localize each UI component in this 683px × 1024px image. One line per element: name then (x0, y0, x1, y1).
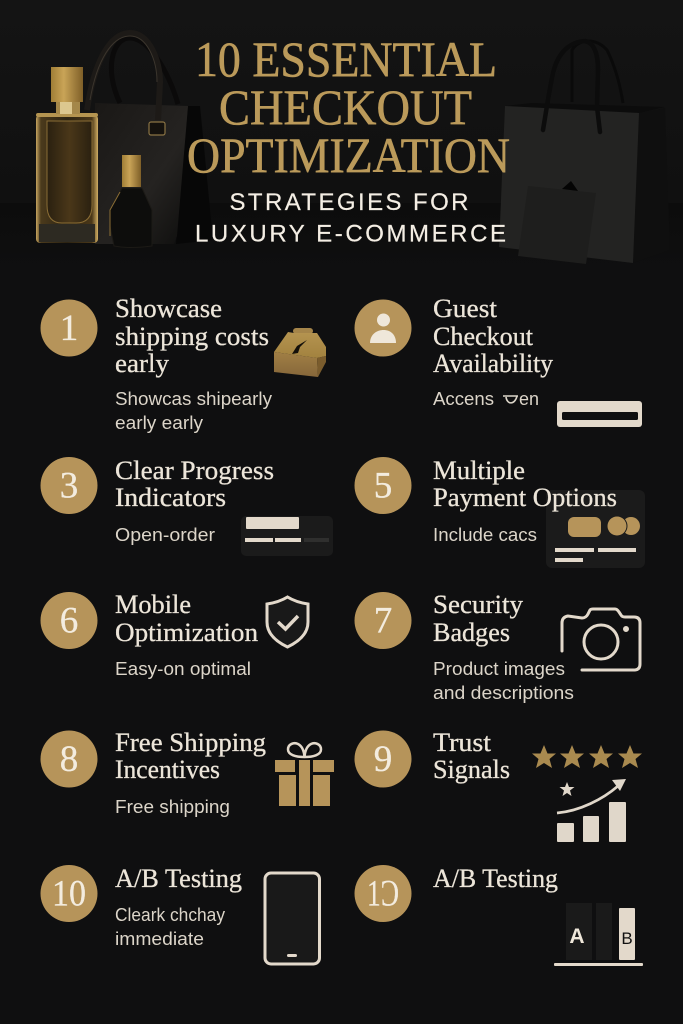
item 8: free shipping: Free Shipping (115, 728, 266, 757)
item 2: guest checkout: Availability (433, 349, 553, 378)
item 5: payment options (354, 456, 645, 568)
item 5: payment options: Payment Options (433, 483, 617, 512)
icon: A/B columns: A (569, 925, 585, 948)
icon: camera (562, 609, 640, 670)
small perfume bottle (110, 155, 152, 248)
item 9: trust signals: Signals (433, 755, 510, 784)
item 6: mobile optimization (40, 590, 308, 679)
item 1: shipping costs: early early (115, 413, 203, 433)
item 9: trust signals: 9 (374, 739, 392, 780)
icon: person (370, 314, 396, 343)
item 8: free shipping: Incentives (115, 755, 220, 784)
item 3: progress indicators: Open-order (115, 525, 215, 545)
icon: growth chart (557, 779, 626, 842)
item 7: security badges: 7 (374, 600, 392, 642)
subtitle (195, 189, 506, 248)
item 10: A/B testing left (40, 864, 320, 964)
item 10: A/B testing left: immediate (115, 929, 204, 949)
item 10: A/B testing left: Cleark chchay (115, 905, 225, 925)
backdrop (0, 0, 683, 203)
header product photo (0, 0, 683, 278)
subtitle: LUXURY E-COMMERCE (195, 220, 506, 248)
item 1: shipping costs: early (115, 349, 169, 378)
title: OPTIMIZATION (187, 127, 510, 183)
item 7: security badges: Product images (433, 659, 565, 679)
item 1: shipping costs (40, 294, 326, 433)
icon: A/B columns (554, 903, 643, 966)
item 10: A/B testing right (354, 864, 643, 966)
item 8: free shipping: 8 (60, 739, 78, 780)
item 6: mobile optimization: Mobile (115, 590, 191, 619)
item 3: progress indicators: Indicators (115, 483, 226, 512)
item 5: payment options: Include cacs (433, 525, 537, 545)
left bag (87, 33, 213, 244)
item 1: shipping costs: shipping costs (115, 322, 269, 351)
item 1: shipping costs: Showcas shipearly (115, 389, 272, 409)
item 7: security badges (354, 590, 640, 703)
item 3: progress indicators: 3 (60, 466, 78, 506)
right shopping bag (499, 41, 670, 264)
item 2: guest checkout: Guest (433, 294, 498, 323)
item 7: security badges: and descriptions (433, 683, 574, 703)
icon: phone (265, 873, 320, 964)
item 10: A/B testing right: 1Ɔ (367, 874, 399, 914)
title (187, 31, 510, 183)
title: CHECKOUT (219, 79, 472, 135)
item 3: progress indicators: Clear Progress (115, 456, 274, 485)
item 5: payment options: 5 (374, 466, 392, 506)
large perfume bottle (36, 67, 98, 243)
item 10: A/B testing left: 10 (52, 874, 86, 914)
icon: input bar (557, 401, 642, 427)
item 2: guest checkout: en (519, 389, 539, 409)
item 10: A/B testing right: A/B Testing (433, 864, 558, 893)
item 8: free shipping: Free shipping (115, 797, 230, 817)
icon: box (274, 328, 326, 377)
item 6: mobile optimization: 6 (60, 600, 78, 642)
icon: A/B columns: B (621, 929, 633, 948)
subtitle: STRATEGIES FOR (230, 189, 468, 216)
item 7: security badges: Badges (433, 618, 510, 647)
icon: gift (275, 743, 334, 806)
item 6: mobile optimization: Easy-on optimal (115, 659, 251, 679)
item 2: guest checkout: Checkout (433, 322, 534, 351)
item 9: trust signals: Trust (433, 728, 492, 757)
item 2: guest checkout: Accens (433, 389, 494, 409)
item 1: shipping costs: 1 (60, 308, 78, 349)
title: 10 ESSENTIAL (195, 31, 497, 87)
item 6: mobile optimization: Optimization (115, 618, 258, 647)
icon: progress bar card (241, 516, 333, 556)
item 9: trust signals (354, 728, 642, 842)
item 10: A/B testing left: A/B Testing (115, 864, 242, 893)
icon: payment card (546, 490, 645, 568)
item 3: progress indicators (40, 456, 333, 556)
item 2: guest checkout (354, 294, 642, 427)
item 1: shipping costs: Showcase (115, 294, 222, 323)
icon: four stars (532, 745, 642, 768)
icon: shield (267, 597, 308, 647)
item 8: free shipping (40, 728, 334, 817)
item 5: payment options: Multiple (433, 456, 525, 485)
item 7: security badges: Security (433, 590, 523, 619)
floor shade (0, 203, 683, 278)
